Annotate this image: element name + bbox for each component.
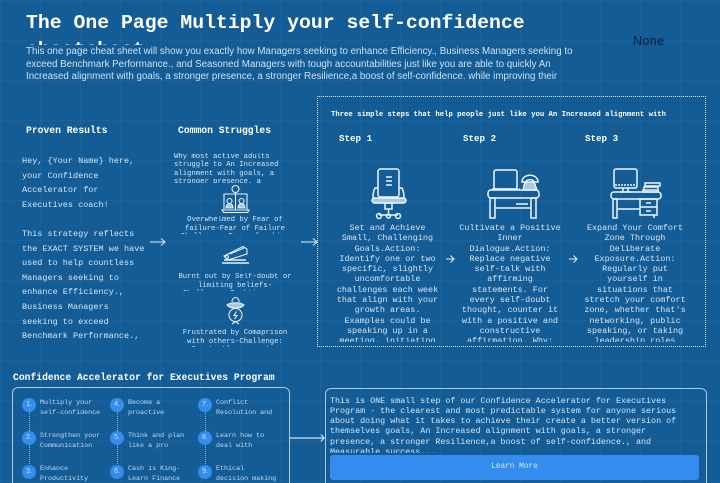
text: Become a	[128, 399, 160, 407]
text: Think and plan	[128, 432, 184, 440]
struggle 2 text	[178, 273, 292, 291]
step 3 text: Deliberate	[610, 244, 660, 254]
text: Productivity	[40, 475, 88, 483]
proven results body: used to help countless	[22, 258, 134, 268]
step 3 text: Expand Your Comfort	[587, 223, 683, 233]
step 1 text: uncomfortable	[355, 274, 420, 284]
text: 2.	[26, 434, 32, 441]
text: self-confidence	[40, 409, 100, 417]
text: Conflict	[216, 399, 248, 407]
text: Cash is King-	[128, 465, 180, 473]
step 2 text: constructive	[480, 326, 540, 336]
proven results body	[22, 156, 144, 341]
program heading: Confidence Accelerator for Executives Program	[13, 372, 275, 382]
step 2 text: statements. For	[472, 285, 548, 295]
proven results body: This strategy reflects	[22, 229, 134, 239]
text: Learn how to	[216, 432, 264, 440]
struggle 2 text: Burnt out by Self-doubt or	[178, 273, 292, 281]
step 1 text: Examples could be	[344, 316, 431, 326]
struggle 1 text	[181, 216, 289, 234]
text: 1.	[26, 401, 32, 408]
text: Enhance	[40, 465, 68, 473]
arrow: step 2 to step 3	[569, 255, 578, 263]
call to action text	[330, 396, 676, 453]
arrow: program to call to action	[289, 434, 325, 442]
call to action text: about doing what it takes to achieve their create a better version of	[330, 416, 676, 426]
module labels	[40, 399, 276, 483]
text: decision making	[216, 475, 276, 483]
text: 9.	[202, 468, 208, 474]
text: Ethical	[216, 465, 244, 473]
intro text: Increased alignment with goals, a stronger presence, a stronger Resilience,a boost of self-confidence. while improving their	[26, 71, 557, 82]
proven results body: Business Managers	[22, 302, 109, 312]
heading: common struggles: Common Struggles	[178, 125, 271, 136]
step 3 text: Regularly put	[602, 264, 668, 274]
text: 6.	[114, 468, 120, 474]
step 1 text: speaking up in a	[347, 326, 428, 336]
heading: proven results: Proven Results	[26, 125, 107, 136]
call to action text: presence, a stronger Resilience,a boost of self-confidence., and	[330, 437, 651, 447]
step 1 title: Step 1	[339, 133, 372, 144]
text: Communication	[40, 442, 92, 450]
step 2 text	[459, 223, 561, 342]
icon: scales and laptops	[221, 185, 250, 213]
step 2 text: affirming	[487, 274, 533, 284]
icon: desk with phone	[487, 169, 540, 219]
text: Multiply your	[40, 399, 92, 407]
icon: stapler	[222, 246, 249, 264]
text: Strengthen your	[40, 432, 100, 440]
step 2 text: every self-doubt	[469, 295, 550, 305]
step 2 text: Inner	[497, 233, 523, 243]
step 1 text: Identify one or two	[339, 254, 436, 264]
struggles intro text: struggle to An Increased	[174, 161, 278, 169]
step 2 title: Step 2	[463, 133, 496, 144]
step 2 text: Cultivate a Positive	[459, 223, 561, 233]
arrow: step 1 to step 2	[446, 255, 455, 263]
steps heading: Three simple steps that help people just like you An Increased alignment with	[331, 110, 666, 118]
call to action text: Program - the clearest and most predictable system for anyone serious	[330, 406, 676, 416]
step 1 text: Set and Achieve	[350, 223, 425, 233]
step 2 text: self-talk with	[475, 264, 545, 274]
proven results body: Benchmark Performance.,	[22, 331, 139, 341]
call to action text: themselves goals, An Increased alignment with goals, a stronger	[330, 426, 646, 436]
text: proactive	[128, 409, 164, 417]
text: like a pro	[128, 442, 168, 450]
struggle 3 text: Frustrated by Comaprison	[183, 329, 287, 337]
step 1 text: challenges each week	[337, 285, 438, 295]
text: deal with	[216, 442, 252, 450]
struggle 3 text	[183, 329, 287, 347]
button: learn more: Learn More	[491, 463, 538, 471]
step 1 text: specific, slightly	[342, 264, 433, 274]
proven results body: Hey, {Your Name} here,	[22, 156, 134, 166]
struggles intro text	[174, 153, 278, 183]
step 2 text: Dialogue.Action:	[469, 244, 550, 254]
struggle 2 text: limiting beliefs-	[198, 282, 272, 290]
step 3 text	[584, 223, 686, 342]
struggles intro text: Why most active adults	[174, 153, 270, 161]
step 2 text: Replace negative	[469, 254, 550, 264]
struggle 1 text: Overwhelmed by Fear of	[187, 216, 283, 224]
module numbers	[22, 398, 212, 479]
step 3 text: yourself in	[607, 274, 663, 284]
panel: three steps	[317, 96, 706, 347]
step 1 text	[337, 223, 438, 342]
proven results body: seeking to exceed	[22, 317, 109, 327]
icon: desk with computer	[610, 168, 662, 219]
intro text: This one page cheat sheet will show you exactly how Managers seeking to enhance Efficiency., Business Managers seeking to	[26, 46, 572, 57]
panel: program modules	[12, 387, 290, 483]
arrow: struggles to steps	[301, 238, 318, 246]
text: 8.	[202, 434, 208, 441]
step 1 text: that align with your	[337, 295, 438, 305]
step 3 text: stretch your comfort	[584, 295, 686, 305]
step 1 text: Small, Challenging	[342, 233, 433, 243]
icon: office chair	[371, 168, 407, 220]
proven results body: enhance Efficiency.,	[22, 287, 124, 297]
intro text	[26, 46, 572, 82]
struggles intro text: alignment with goals, a	[174, 170, 274, 178]
button: learn more	[330, 455, 699, 480]
text: 5.	[114, 434, 120, 441]
placeholder label: None: None	[633, 34, 664, 48]
proven results body: Executives coach!	[22, 200, 109, 210]
text: 3.	[26, 468, 32, 474]
step 3 text: zone, whether that's	[584, 305, 686, 315]
step 1 text: growth areas.	[355, 305, 420, 315]
step 1 text: Goals.Action:	[355, 244, 420, 254]
struggle 3 text: with others-Challenge:	[187, 338, 283, 346]
step 3 text: Exposure.Action:	[594, 254, 676, 264]
struggle 1 text: failure-Fear of Failure	[185, 225, 285, 233]
text: 7.	[202, 401, 208, 408]
icon: money bag	[226, 297, 245, 324]
arrow: results to struggles	[150, 238, 166, 246]
text: Learn Finance	[128, 475, 180, 483]
module connectors	[29, 412, 206, 464]
step 3 text: speaking, or taking	[587, 326, 683, 336]
proven results body: Managers seeking to	[22, 273, 119, 283]
text: 4.	[114, 401, 120, 408]
step 3 title: Step 3	[585, 133, 618, 144]
panel: call to action	[325, 388, 707, 483]
proven results body: Accelerator for	[22, 185, 99, 195]
step 3 text: networking, public	[589, 316, 681, 326]
text: Resolution and	[216, 409, 272, 417]
proven results body: your Confidence	[22, 171, 99, 181]
step 2 text: with a positive and	[462, 316, 558, 326]
step 3 text: Zone Through	[605, 233, 665, 243]
call to action text: This is ONE small step of our Confidence Accelerator for Executives	[330, 396, 666, 406]
proven results body: the EXACT SYSTEM we have	[22, 244, 144, 254]
step 2 text: thought, counter it	[462, 305, 558, 315]
step 3 text: situations that	[597, 285, 673, 295]
intro text: exceed Benchmark Performance., and Seasoned Managers with tough accountabilities just like you are able to quickly An	[26, 59, 551, 70]
